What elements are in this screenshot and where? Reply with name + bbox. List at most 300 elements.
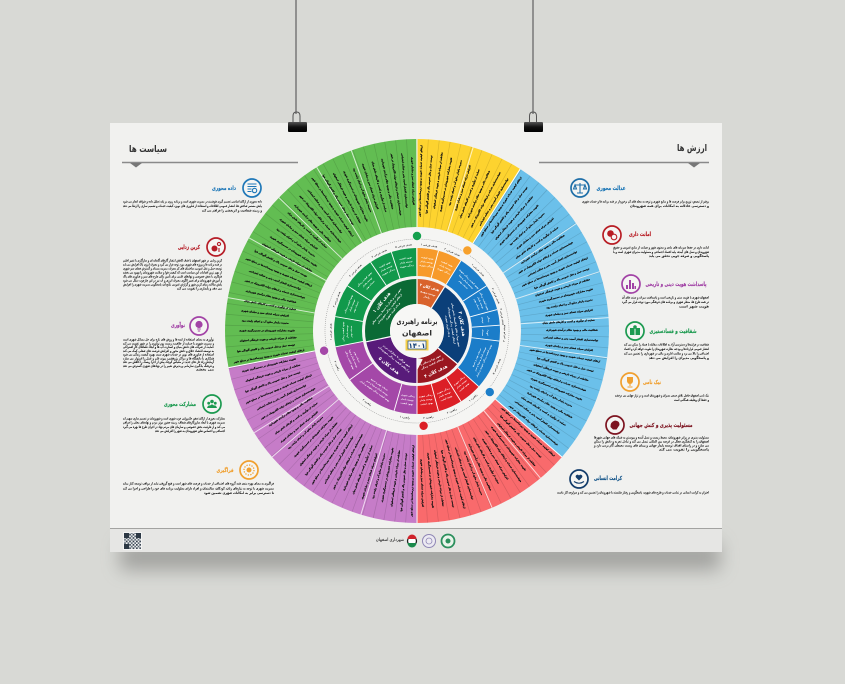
inner ring: goal 1: شهر سبز و پایدار با محیط زیست سالم (371, 287, 403, 325)
middle ring cell text: خدمات بهتر (457, 279, 469, 290)
outer ring: yellow sector text: توسعه حمل و نقل عمومی پاک و کاهش آلودگی هوا (424, 155, 433, 214)
outer ring: red sector text (420, 406, 555, 509)
outer ring: red sector text: حمایت از نوآوری و کسب و کارهای دانش بنیان (473, 437, 500, 485)
middle ring cell text: توسعه (481, 317, 484, 324)
outer ring: purple sector text: افزایش سرانه فضای سبز و مبلمان شهری (280, 411, 319, 443)
middle ring cell text: خدمات بهتر (350, 325, 353, 339)
value item: responsibility and global action: اصفهان را به کنشگری فعال در عرصه بین المللی تبدیل می کند و تبادل تجربه و دانش را ممکن (594, 438, 709, 444)
outer ring: yellow sector text: افزایش سرانه فضای سبز و مبلمان شهری (454, 165, 472, 211)
middle ring cell text: زندگی شهری (437, 267, 451, 276)
policy item: decarbonisation: پایش سالانه ردپای کربن شهر و گزارش عمومی نتایج آن، پاسخگویی مدیریت شهری را افزایش (123, 282, 222, 286)
seal logo (422, 534, 436, 548)
outer ring: green sector text: مدیریت پایدار منابع آب و احیای زاینده رود (276, 228, 316, 258)
policy item: innovation: استفاده از فناوری های نوین در خدمات شهری سبب بهبود کیفیت زندگی می شود (123, 352, 214, 356)
outer ring: blue sector text: حمایت از نوآوری و کسب و کارهای دانش بنیان (515, 226, 559, 259)
outer ring: green sector text: ارتقای کیفیت خدمات شهری و بهبود زیرساخت‌ها در سطح شهر (233, 349, 305, 364)
policy item: decarbonisation: و آموزش شهروندان برای تغییر الگوی مصرف انرژی و آب نیز در این چارچوب دنبال می شود (123, 278, 222, 282)
outer ring: blue sector text (479, 176, 601, 447)
inner ring: goal 4: ارتقای کیفیت زندگی (420, 357, 444, 371)
middle ring cell text: بهبود کیفیت زندگی (357, 271, 373, 288)
outer ring: blue sector text: توسعه حمل و نقل عمومی پاک و کاهش آلودگی هوا (536, 356, 594, 373)
value item: human dignity (557, 470, 709, 494)
inner ring: goal 5: هدف کلان ۵ (377, 356, 401, 377)
policy item: decarbonisation: در همه برنامه ها و پروژه های شهری مورد توجه قرار می گیرد و مصرف انرژی پاک افزایش می یابد (123, 262, 222, 266)
middle ring cell text: زندگی شهری (419, 264, 434, 269)
middle ring cell text: بهبود کیفیت (458, 382, 470, 393)
outer ring: purple sector text: تقویت مشارکت شهروندان در تصمیم‌گیری شهری (380, 447, 394, 503)
ring labels: هدف فرعی ۴ (371, 249, 388, 259)
outer ring: purple sector text: توسعه حمل و نقل عمومی پاک و کاهش آلودگی هوا (244, 370, 301, 393)
ring labels: هدف فرعی ۲ (333, 291, 342, 308)
outer ring: red sector text: توسعه حمل و نقل عمومی پاک و کاهش آلودگی هوا (440, 450, 456, 508)
middle ring cell text: بهبود کیفیت زندگی (479, 291, 490, 311)
middle ring cell text: زندگی شهری (418, 393, 433, 398)
outer ring sectors (269, 183, 565, 479)
outer ring: red sector text: توسعه حمل و نقل عمومی پاک و کاهش آلودگی هوا (499, 414, 543, 459)
policy item: data: داده محوری از ارکان اساسی تصمیم گیری هوشمند در مدیریت شهری است و برنامه ریزی بر پایه تحلیل داده و شواهد انجام می شود (123, 198, 262, 204)
middle ring cell text: توسعه پایدار (348, 299, 356, 313)
middle ring cell text: توسعه پایدار (419, 398, 433, 402)
middle ring cell text: توسعه پایدار (455, 379, 468, 390)
footer strip (110, 528, 722, 552)
outer ring: green sector text: حفاظت از میراث تاریخی و هویت فرهنگی اصفهان (332, 172, 363, 225)
inner ring: goal 1: و تاب آوری شهری (384, 301, 401, 321)
poster shadow (120, 542, 720, 570)
middle ring cell text: توسعه پایدار (361, 277, 373, 289)
outer ring: blue sector text: افزایش سرانه فضای سبز و مبلمان شهری (545, 309, 593, 317)
middle ring cell text: توسعه پایدار و پویا (348, 349, 359, 368)
outer ring: blue sector text: تقویت مشارکت شهروندان در تصمیم‌گیری شهری (538, 287, 593, 303)
outer ring: red sector text: افزایش سرانه فضای سبز و مبلمان شهری (420, 459, 424, 507)
outer ring: blue sector text: افزایش سرانه فضای سبز و مبلمان شهری (545, 344, 593, 352)
outer ring: blue sector text: تقویت مشارکت شهروندان در تصمیم‌گیری شهری (498, 203, 539, 246)
outer ring: blue sector text: حفاظت از میراث تاریخی و هویت فرهنگی اصفهان (535, 277, 591, 297)
policy item: data: پایش مستمر شاخص ها، انتشار عمومی اطلاعات و استفاده از فناوری های نوین، کیفیت خدمات و تصمیم سازی را ارتقا می دهد (123, 204, 262, 208)
icon: shield blocks (626, 322, 644, 340)
middle ring cell text: بهبود کیفیت زندگی (344, 351, 355, 370)
outer ring: purple sector text: حمایت از نوآوری و کسب و کارهای دانش بنیان (352, 444, 374, 495)
outer ring: green sector text: توسعه حمل و نقل عمومی پاک و کاهش آلودگی هوا (237, 342, 295, 353)
icon: data (243, 179, 261, 197)
base disc (312, 226, 522, 436)
outer ring: green sector text (233, 152, 415, 364)
outer ring: red sector text: شفافیت مالی و بهبود نظام درآمدی شهرداری (468, 443, 492, 492)
policy item: participation (123, 395, 225, 433)
middle ring cell text: خدمات بهتر (352, 300, 360, 314)
ring labels (329, 243, 506, 420)
value item: justice: و دسترسی عادلانه به امکانات برای همه شهروندان (630, 204, 709, 208)
outer ring: green sector text: حمایت از نوآوری و کسب و کارهای دانش بنیان (287, 211, 328, 249)
outer ring: green sector text: شفافیت مالی و بهبود نظام درآمدی شهرداری (245, 289, 297, 304)
middle ring cell text: توسعه پایدار (399, 260, 413, 265)
outer ring: blue sector text: حمایت از نوآوری و کسب و کارهای دانش بنیان (521, 396, 567, 427)
policy item: innovation: آزمایش راه حل های جدید در مقیاس کوچک پیش از اجرا ریسک را کاهش می دهد (123, 360, 215, 364)
middle ring cell text: توسعه پایدار (437, 391, 451, 399)
outer ring: purple sector text: هوشمندسازی خدمات و ارتقای دولت الکترونیک در شهر (259, 387, 316, 421)
middle ring cell text: توسعه پایدار (476, 295, 485, 309)
outer ring: yellow sector text: شفافیت مالی و بهبود نظام درآمدی شهرداری (467, 169, 491, 218)
value item: human dignity: کرامت انسانی (594, 475, 623, 482)
outer ring: red sector text: حفاظت از میراث تاریخی و هویت فرهنگی اصفهان (497, 421, 537, 467)
policy item: decarbonisation (123, 238, 225, 290)
middle ring cell text: زندگی (486, 316, 491, 323)
inner ring: goal 2: توسعه شهری (420, 290, 436, 297)
middle ring cell text: خدمات بهتر (353, 350, 361, 364)
inner ring: goal 5: و ارتقای کیفیت زندگی شهروندان (378, 345, 411, 373)
outer ring: yellow sector text: هوشمندسازی خدمات و ارتقای دولت الکترونیک در شهر (469, 171, 502, 229)
policy item: innovation: و فرهنگ یادگیری سازمانی و پذیرش تغییر را در نهادهای شهری گسترش می دهد (123, 363, 214, 368)
value item: good reputation (615, 373, 709, 402)
outer ring: yellow sector text: تقویت مشارکت شهروندان در تصمیم‌گیری شهری (438, 157, 453, 212)
outer ring: purple sector text: مدیریت پایدار منابع آب و احیای زاینده رود (371, 452, 386, 499)
value item: human dignity: احترام به کرامت انسانی در تمامی خدمات و طرح های شهری، پاسخگویی و رفتار شایسته با شهروندان را تضمین می کند و سرلوحه کار ماست (557, 490, 709, 494)
value item: good reputation: نیک نامی (643, 379, 661, 386)
outer ring: purple sector text (241, 356, 415, 518)
outer ring: green sector text: افزایش سرانه فضای سبز و مبلمان شهری (361, 163, 379, 210)
middle ring cell text: بهبود کیفیت زندگی (344, 294, 354, 314)
icon: people (203, 395, 221, 413)
middle ring cell text: توسعه پایدار (346, 325, 349, 339)
middle ring cell dividers (335, 248, 500, 414)
policy item: inclusion: تا دسترسی برابر به امکانات شهری تضمین شود (204, 491, 275, 495)
outer ring: purple sector text: توسعه حمل و نقل عمومی پاک و کاهش آلودگی هوا (399, 453, 408, 512)
outer ring: blue sector text: شفافیت مالی و بهبود نظام درآمدی شهرداری (546, 329, 599, 332)
inner ring: goal 4: شهر پویا و سالم با (420, 354, 442, 367)
outer ring: blue sector text: توانمندسازی اقشار آسیب پذیر و عدالت اجتماعی (514, 400, 560, 435)
middle ring cell text: بهبود کیفیت (420, 402, 433, 406)
outer ring: green sector text: افزایش سرانه فضای سبز و مبلمان شهری (241, 309, 289, 318)
ring labels: راهبرد ۱ (468, 393, 479, 402)
outer ring: green sector text: افزایش سرانه فضای سبز و مبلمان شهری (279, 218, 318, 251)
middle ring cell text: بهبود کیفیت (440, 394, 453, 402)
outer ring: purple sector text: حفاظت از میراث تاریخی و هویت فرهنگی اصفهان (389, 449, 401, 507)
middle ring cell text: توسعه پایدار (379, 264, 393, 273)
outer ring: yellow sector text: مدیریت پایدار منابع آب و احیای زاینده رود (448, 159, 463, 206)
value item: transparency: شفافیت و فسادستیزی (650, 329, 697, 335)
middle ring cell text: خدمات بهتر (364, 279, 376, 291)
outer ring: green sector text: توانمندسازی اقشار آسیب پذیر و عدالت اجتماعی (307, 189, 343, 234)
outer ring: green sector text: شفافیت مالی و بهبود نظام درآمدی شهرداری (381, 158, 394, 210)
value item: transparency: اجتماعی را بالا می برد و سلامت اداری و مالی در شهرداری را تضمین می کند (624, 352, 709, 356)
policy item: participation: مشارکت محوری از ارکان تحقق حکمروایی خوب شهری است و شهروندان در تصمیم سازی سهیم اند (123, 416, 225, 420)
policy item: innovation: به توسعه اقتصاد خلاق و دانش محور و افزایش فرصت های شغلی کمک می کند (123, 349, 214, 353)
middle ring cell text: توسعه پایدار و پویا و سبز (365, 379, 389, 397)
outer ring: red sector text: افزایش سرانه فضای سبز و مبلمان شهری (481, 438, 509, 480)
inner ring: goal 1: ارتقای کیفیت زندگی شهروندان (376, 293, 403, 324)
ring labels: هدف فرعی ۳ (349, 264, 363, 278)
ring labels: هدف فرعی ۳ (499, 308, 505, 326)
outer ring: green sector text: ارتقای کیفیت خدمات شهری و بهبود زیرساخت‌ها در سطح شهر (310, 176, 354, 238)
inner ring: goal 4 (419, 354, 449, 380)
outer ring: purple sector text: شفافیت مالی و بهبود نظام درآمدی شهرداری (268, 396, 314, 427)
value item: trustworthiness (603, 226, 710, 258)
icon: heart in hand (570, 470, 588, 488)
municipality logo and name: شهرداری اصفهان (376, 538, 404, 543)
inner ring: goal 1 (365, 283, 409, 330)
year badge: ۱۴۰۱ (408, 342, 426, 350)
ring labels: هدف فرعی ۱ (471, 263, 485, 277)
outer ring: blue sector text: هوشمندسازی خدمات و ارتقای دولت الکترونیک در شهر (526, 368, 587, 392)
outer ring: purple sector text: حفاظت از میراث تاریخی و هویت فرهنگی اصفهان (298, 421, 339, 467)
municipality logo and name (376, 534, 416, 548)
middle ring cell text: توسعه (482, 329, 484, 336)
value item: trustworthiness: امانت داری (629, 232, 651, 238)
outer ring: green sector text: حفاظت از میراث تاریخی و هویت فرهنگی اصفهان (240, 335, 297, 343)
policy item: data: و زمینه شفافیت و اثربخشی را فراهم می کند (202, 208, 262, 212)
ring labels: هدف فرعی ۴ (503, 325, 506, 342)
outer ring: blue sector text: هوشمندسازی خدمات و ارتقای دولت الکترونیک در شهر (517, 241, 574, 275)
ring labels: هدف فرعی ۱ (329, 323, 333, 340)
middle ring cell text: خدمات بهتر و سریع (471, 347, 483, 367)
value item: responsibility and global action: می سازد و در راستای اهداف توسعه پایدار جهانی و پیمان های زیست محیطی گام برمی دارد و (593, 442, 709, 448)
value item: transparency: و پاسخگویی مدیران را افزایش می دهد (649, 355, 709, 360)
ring labels: هدف فرعی ۲ (444, 248, 460, 257)
middle ring cell text: زندگی شهری (401, 393, 416, 398)
icon: bulb (190, 317, 208, 335)
outer ring: blue sector text: توسعه حمل و نقل عمومی پاک و کاهش آلودگی هوا (489, 186, 528, 234)
outer ring: green sector text: توسعه حمل و نقل عمومی پاک و کاهش آلودگی هوا (322, 173, 355, 226)
outer ring: blue sector text: ارتقای کیفیت خدمات شهری و بهبود زیرساخت‌ها در سطح شهر (520, 257, 589, 288)
centre title: اصفهان (402, 328, 432, 338)
policy item: participation: مشارکت محوری (164, 401, 196, 408)
icon: monument (622, 275, 640, 293)
outer ring: green sector text: مدیریت پایدار منابع آب و احیای زاینده رود (352, 168, 373, 213)
wheel chart (228, 139, 609, 523)
policy item: innovation: همکاری با دانشگاه ها و مراکز پژوهشی، پیوند علم و عمل را استوار می سازد (123, 355, 214, 360)
middle ring cell text: بهبود کیفیت (399, 256, 412, 261)
heading: values (539, 143, 709, 168)
value item: justice: پرهیز از تبعیض، توزیع برابر فرصت ها و منابع شهری و توجه به محله های کم برخوردار در همه برنامه ها و خدمات شهری (582, 200, 709, 204)
outer ring: blue sector text: مدیریت پایدار منابع آب و احیای زاینده رود (529, 384, 573, 408)
middle ring cell text: توسعه پایدار و پویا (458, 274, 474, 290)
middle ring cell text: توسعه پایدار (438, 263, 452, 272)
middle ring cell text: زندگی شهری (453, 375, 466, 387)
ring labels: راهبرد ۲ (362, 398, 372, 407)
outer ring: red sector text: هوشمندسازی خدمات و ارتقای دولت الکترونیک در شهر (484, 429, 522, 483)
outer ring dividers (228, 139, 609, 523)
policy item: participation: اجتماعی و احساس تعلق شهروندان به شهر را افزایش می دهد (155, 429, 225, 433)
policy item: decarbonisation: توسعه حمل و نقل عمومی، ساختمان های کم مصرف، مدیریت پسماند و گسترش فضای سبز شهری (123, 266, 222, 270)
middle ring cell text: زندگی (486, 329, 489, 336)
ring labels: راهبرد ۱ (400, 415, 411, 420)
outer ring: green sector text: توانمندسازی اقشار آسیب پذیر و عدالت اجتماعی (248, 270, 301, 291)
policy item: participation: مدیریت شهری با ایجاد سازوکارهای شفاف، زمینه حضور موثر مردم و نهادهای محلی را فراهم (123, 421, 225, 425)
outer ring: green sector text: ارتقای کیفیت خدمات شهری و بهبود زیرساخت‌ها در سطح شهر (244, 257, 313, 288)
outer ring: yellow sector text: حفاظت از میراث تاریخی و هویت فرهنگی اصفهان (432, 152, 444, 209)
policy item: decarbonisation: کربن زدایی (178, 244, 201, 251)
policy item: innovation: و مدیریت شهری با حمایت از خلاقیت، زیست بوم نوآوری را در شهر تقویت می کند (123, 341, 214, 345)
outer ring: red sector text: حفاظت از میراث تاریخی و هویت فرهنگی اصفهان (433, 450, 446, 507)
outer ring: red sector text: تقویت مشارکت شهروندان در تصمیم‌گیری شهری (490, 425, 528, 472)
outer ring: purple sector text: توانمندسازی اقشار آسیب پذیر و عدالت اجتماعی (323, 436, 354, 484)
outer ring: red sector text: توانمندسازی اقشار آسیب پذیر و عدالت اجتماعی (454, 447, 474, 500)
ring labels: راهبرد ۳ (423, 416, 434, 420)
outer ring: blue sector text: حمایت از نوآوری و کسب و کارهای دانش بنیان (542, 319, 595, 325)
policy item: innovation (123, 317, 215, 372)
policy item: inclusion: فراگیری (216, 466, 234, 474)
policy item: innovation: حمایت از شرکت های دانش بنیان و استارت آپ ها و ایجاد فضاهای کار اشتراکی (123, 345, 214, 349)
middle ring cell text: توسعه پایدار و پویا و سبز (473, 347, 487, 373)
outer ring: purple sector text: ارتقای کیفیت خدمات شهری و بهبود زیرساخت‌ها در سطح شهر (310, 424, 354, 486)
inner ring: goal 2: پایدار (422, 295, 430, 300)
inner ring: goal 5: شهر فراگیر با مشارکت مردم (382, 344, 412, 369)
outer ring: purple sector text: توسعه حمل و نقل عمومی پاک و کاهش آلودگی هوا (304, 427, 342, 476)
value item: trustworthiness: شهروندان و نسل های آینده، پایه اعتماد اجتماعی و مسئولیت مدیران شهری است و با (613, 250, 709, 254)
value item: religious and historic identity: اصفهان شهری با هویت دینی و تاریخی است و پاسداشت میراث و سنت های آن (622, 296, 709, 300)
middle ring cell text: بهبود کیفیت زندگی (342, 321, 345, 342)
value item: responsibility and global action: مسئولیت پذیری در برابر شهروندان، محیط زیست و نسل آینده و پیوستن به شبکه های جهانی شهرها (594, 436, 709, 440)
outer ring: red sector text: تقویت مشارکت شهروندان در تصمیم‌گیری شهری (427, 452, 435, 508)
outer ring: green sector text: حمایت از نوآوری و کسب و کارهای دانش بنیان (371, 161, 387, 213)
value item: justice: عدالت محوری (596, 186, 626, 192)
outer ring: green sector text: هوشمندسازی خدمات و ارتقای دولت الکترونیک در شهر (390, 152, 402, 216)
policy item: decarbonisation: همکاری با بخش خصوصی و نهادهای علمی برای تأمین مالی طرح های سبز و فناوری های پاک (123, 274, 222, 278)
middle ring cell text (342, 256, 493, 406)
middle ring cell text: بهبود کیفیت زندگی شهری و پایدار (359, 379, 390, 403)
icon: sun (240, 461, 258, 479)
dashed guide ring and sector dots (319, 231, 509, 431)
outer ring: red sector text: مدیریت پایدار منابع آب و احیای زاینده رود (463, 451, 483, 496)
green round logo (442, 534, 454, 548)
outer ring: blue sector text: شفافیت مالی و بهبود نظام درآمدی شهرداری (526, 391, 574, 420)
ring labels: هدف فرعی ۱ (420, 243, 438, 249)
ring labels: هدف فرعی ۵ (492, 358, 502, 375)
policy item: decarbonisation: کربن زدایی در شهر اصفهان با هدف کاهش انتشار گازهای گلخانه ای و سازگاری با تغییر اقلیم (123, 258, 222, 262)
outer ring: blue sector text: مدیریت پایدار منابع آب و احیای زاینده رود (509, 212, 546, 246)
outer ring: purple sector text: ارتقای کیفیت خدمات شهری و بهبود زیرساخت‌ها در سطح شهر (410, 445, 415, 518)
outer ring: blue sector text: افزایش سرانه فضای سبز و مبلمان شهری (516, 217, 555, 250)
icon: hands (606, 416, 624, 434)
hanging wires and clips (288, 0, 543, 132)
outer ring: green sector text: تقویت مشارکت شهروندان در تصمیم‌گیری شهری (239, 328, 295, 332)
outer ring: green sector text: تقویت مشارکت شهروندان در تصمیم‌گیری شهری (343, 170, 370, 222)
outer ring: purple sector text: مدیریت پایدار منابع آب و احیای زاینده رود (287, 415, 324, 450)
outer ring: blue sector text: ارتقای کیفیت خدمات شهری و بهبود زیرساخت‌ها در سطح شهر (528, 348, 601, 363)
outer ring: yellow sector text: حمایت از نوآوری و کسب و کارهای دانش بنیان (459, 168, 481, 219)
outer ring: purple sector text: تقویت مشارکت شهروندان در تصمیم‌گیری شهری (241, 356, 296, 373)
outer ring: green sector text: توسعه حمل و نقل عمومی پاک و کاهش آلودگی هوا (254, 249, 308, 278)
value item: religious and historic identity: در همه طرح ها، منظر شهری و برنامه های فرهنگی مورد توجه قرار می گیرد (622, 299, 709, 304)
outer ring: green sector text: حفاظت از میراث تاریخی و هویت فرهنگی اصفهان (262, 241, 314, 273)
outer ring: blue sector text: حفاظت از میراث تاریخی و هویت فرهنگی اصفهان (533, 362, 590, 382)
middle ring cell text: خدمات بهتر و سریع (370, 378, 389, 392)
outer ring: purple sector text: هوشمندسازی خدمات و ارتقای دولت الکترونیک در شهر (331, 433, 364, 491)
icon: seal (603, 226, 621, 244)
outer ring: purple sector text: حفاظت از میراث تاریخی و هویت فرهنگی اصفهان (245, 363, 301, 383)
policy item: innovation: می بخشد (196, 368, 214, 372)
value item: religious and historic identity (622, 275, 710, 308)
icon: trophy (621, 373, 639, 391)
middle ring cell text: توسعه پایدار (400, 397, 414, 402)
value item: responsibility and global action: پاسخگویی را تقویت می کند (659, 446, 710, 452)
outer ring: purple sector text: ارتقای کیفیت خدمات شهری و بهبود زیرساخت‌ها در سطح شهر (244, 374, 312, 405)
value item: transparency: انتشار عمومی قراردادها و بودجه، نظارت شهروندان را تقویت خواهد کرد و اعتماد (624, 347, 709, 351)
policy item: participation: می کند و از ظرفیت بخش خصوصی و سازمان های مردم نهاد در اجرای طرح ها بهره می گیرد (123, 424, 225, 429)
middle ring cell text: زندگی شهری (381, 267, 396, 277)
inner ring: goal 3: شهر پویا و خلاق با اقتصاد دانش بنیان (451, 303, 461, 348)
outer ring: green sector text: افزایش سرانه فضای سبز و مبلمان شهری (411, 157, 415, 205)
outer ring: green sector text: حمایت از نوآوری و کسب و کارهای دانش بنیان (244, 300, 297, 311)
middle ring cell text: بهبود کیفیت (440, 260, 454, 268)
outer ring: yellow sector text (418, 145, 509, 229)
ring labels: هدف فرعی ۵ (395, 243, 412, 249)
icon: carbon (207, 238, 225, 256)
value item: trustworthiness: امانت داری در حفظ سرمایه های مادی و معنوی شهر و صیانت از منابع عمومی و حقوق (613, 246, 709, 250)
policy item: inclusion: مدیریت شهری با توجه به نیازهای زنان، کودکان، سالمندان و افراد دارای معلولیت برنامه های خود را طراحی و اجرا می کند (123, 486, 274, 490)
value item: responsibility and global action: مسئولیت پذیری و کنش جهانی (630, 422, 693, 429)
value item: religious and historic identity: هویت شهر است (679, 304, 710, 308)
value item: good reputation: و حفظ آن وظیفه همگانی است (674, 397, 709, 402)
policy item: data: داده محوری (212, 186, 236, 192)
outer ring: green sector text: توانمندسازی اقشار آسیب پذیر و عدالت اجتماعی (400, 153, 408, 208)
outer ring: purple sector text: حمایت از نوآوری و کسب و کارهای دانش بنیان (274, 402, 319, 435)
value item: religious and historic identity: پاسداشت هویت دینی و تاریخی (646, 282, 706, 288)
inner ring: goal 3 (443, 302, 468, 349)
policy item: inclusion (123, 461, 275, 495)
outer ring: green sector text: هوشمندسازی خدمات و ارتقای دولت الکترونیک در شهر (298, 194, 342, 244)
ring labels: هدف فرعی ۲ (491, 288, 500, 305)
middle ring cell text: بهبود کیفیت (378, 261, 391, 269)
outer ring: green sector text: شفافیت مالی و بهبود نظام درآمدی شهرداری (293, 204, 332, 243)
outer ring: green sector text: مدیریت پایدار منابع آب و احیای زاینده رود (242, 319, 289, 325)
outer ring: purple sector text: تقویت مشارکت شهروندان در تصمیم‌گیری شهری (293, 415, 334, 458)
outer ring: blue sector text: تقویت مشارکت شهروندان در تصمیم‌گیری شهری (530, 376, 583, 401)
middle ring cell text: زندگی شهری (400, 264, 415, 269)
outer ring: green sector text: تقویت مشارکت شهروندان در تصمیم‌گیری شهری (269, 234, 318, 268)
outer ring: yellow sector text: ارتقای کیفیت خدمات شهری و بهبود زیرساخت‌ها در سطح شهر (418, 145, 423, 218)
value item: trustworthiness: پاسخگویی و صرفه جویی تحقق می یابد (649, 253, 710, 258)
policy item: innovation: نوآوری به معنای استفاده از ایده ها و روش های تازه برای حل مسائل شهری است (123, 338, 214, 342)
icon: scales (571, 179, 589, 197)
heading: values: ارزش ها (677, 143, 707, 154)
ring labels: راهبرد ۳ (333, 361, 340, 372)
inner ring dividers (366, 279, 457, 383)
inner ring: goal 1: هدف کلان ۱ (372, 291, 393, 314)
outer ring: blue sector text: هوشمندسازی خدمات و ارتقای دولت الکترونیک در شهر (508, 404, 559, 447)
centre title (390, 304, 444, 358)
middle ring cell text: بهبود کیفیت زندگی شهری و پایدار (475, 344, 493, 379)
policy item: decarbonisation: از مهم ترین اقدامات این سیاست است که کیفیت هوا و سلامت شهروندان را بهبود می بخشد (123, 270, 222, 274)
outer ring: purple sector text: شفافیت مالی و بهبود نظام درآمدی شهرداری (342, 442, 367, 491)
outer ring: blue sector text: توانمندسازی اقشار آسیب پذیر و عدالت اجتماعی (543, 336, 598, 342)
outer ring: blue sector text: توانمندسازی اقشار آسیب پذیر و عدالت اجتماعی (527, 250, 578, 277)
inner ring: goal 2 (417, 282, 440, 302)
outer ring: blue sector text: حفاظت از میراث تاریخی و هویت فرهنگی اصفهان (494, 195, 534, 241)
middle ring cell text: بهبود کیفیت زندگی شهری (458, 268, 480, 290)
inner ring: goal 4: هدف کلان ۴ (423, 364, 449, 380)
outer ring: red sector text: ارتقای کیفیت خدمات شهری و بهبود زیرساخت‌ها در سطح شهر (444, 438, 466, 509)
outer ring: red sector text: ارتقای کیفیت خدمات شهری و بهبود زیرساخت‌ها در سطح شهر (500, 406, 555, 457)
policy item: innovation: نوآوری (171, 321, 185, 329)
inner ring: goal 2: هدف کلان ۲ (419, 282, 440, 292)
value item: responsibility and global action (593, 416, 710, 452)
outer ring: yellow sector text: توانمندسازی اقشار آسیب پذیر و عدالت اجتماعی (478, 178, 509, 226)
outer ring: purple sector text: افزایش سرانه فضای سبز و مبلمان شهری (361, 453, 378, 500)
policy item: data (123, 179, 262, 212)
heading: policies: سیاست ها (129, 144, 167, 155)
value item: justice (571, 179, 709, 208)
middle ring cell text: بهبود کیفیت (400, 401, 413, 406)
inner ring: goal 3: هدف کلان ۳ (457, 311, 466, 337)
heading: policies (122, 144, 298, 168)
centre title: برنامه راهبردی (396, 317, 438, 326)
outer ring: purple sector text: توانمندسازی اقشار آسیب پذیر و عدالت اجتماعی (256, 384, 307, 411)
outer ring: blue sector text: ارتقای کیفیت خدمات شهری و بهبود زیرساخت‌ها در سطح شهر (479, 176, 523, 238)
outer ring: green sector text: هوشمندسازی خدمات و ارتقای دولت الکترونیک در شهر (244, 279, 306, 299)
middle ring sectors (348, 262, 486, 400)
QR code (123, 532, 142, 550)
policy item: inclusion: فراگیری به معنای بهره مندی همه گروه های اجتماعی از خدمات و فرصت های شهر است و هیچ گروهی نباید از مواهب توسعه کنار بماند (123, 480, 274, 486)
